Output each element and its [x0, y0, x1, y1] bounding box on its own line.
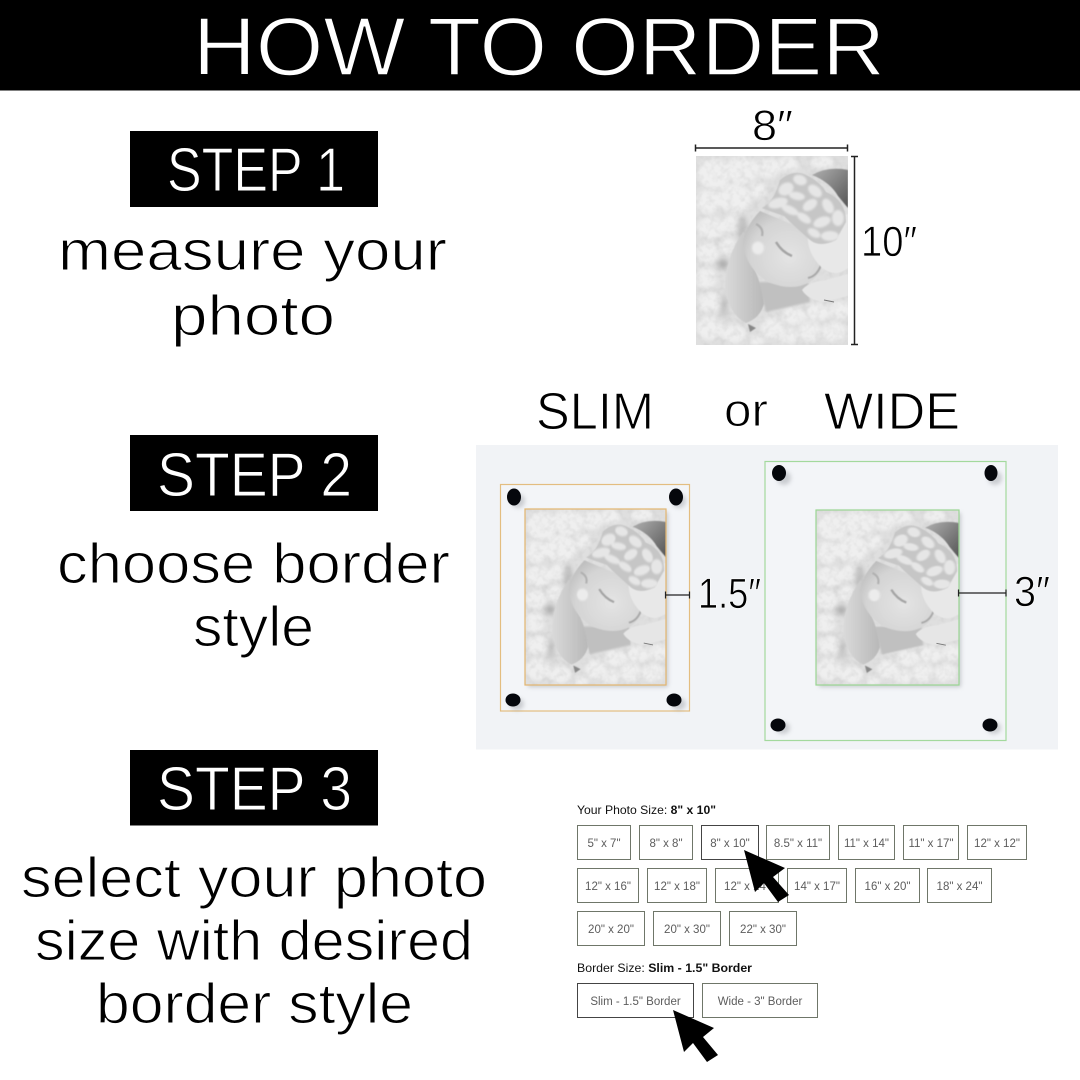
label: 1.5 inch: 1.5″ — [698, 570, 761, 618]
photo size options: 11" x 17" — [908, 838, 954, 850]
step 1 description: photo — [171, 284, 335, 348]
border size options — [578, 984, 818, 1018]
selector heading: border size: Border Size: Slim - 1.5" Border — [577, 961, 752, 975]
step 1 description: measure your — [58, 219, 447, 283]
icon: cursor on size option — [744, 850, 789, 902]
photo size options: 12" x 16" — [585, 881, 631, 893]
step 3 text block — [21, 750, 487, 1036]
measured photo with dimensions — [695, 102, 917, 346]
photo size options — [578, 826, 1026, 946]
step 3 description: border style — [96, 972, 413, 1036]
photo size options: 18" x 24" — [937, 881, 982, 893]
wide frame example — [765, 462, 1050, 740]
photo size options: 5" x 7" — [587, 838, 621, 850]
icon: cursor on border option — [673, 1010, 718, 1062]
step 2 description: choose border — [57, 532, 450, 596]
label: 10 inch: 10″ — [861, 218, 917, 266]
step 1 badge: STEP 1 — [167, 136, 345, 205]
photo size options: 11" x 14" — [844, 838, 889, 850]
border style headings: SLIM — [536, 383, 654, 441]
width dimension line — [696, 144, 848, 152]
step 1 description — [58, 219, 447, 348]
photo size options: 16" x 20" — [865, 881, 910, 893]
border style headings: or — [724, 384, 768, 436]
step 2 description — [57, 532, 450, 659]
step 3 description: size with desired — [35, 909, 473, 973]
step 2 description: style — [193, 595, 314, 659]
step 1 text block — [58, 131, 447, 348]
photo size options: 14" x 17" — [794, 881, 840, 893]
photo size options: 22" x 30" — [740, 924, 786, 936]
photo size options: 12" x 14" — [724, 881, 770, 893]
photo size options: 20" x 20" — [588, 924, 634, 936]
label: 8 inch: 8″ — [752, 102, 793, 150]
slim frame example — [500, 484, 761, 711]
selector heading: photo size: Your Photo Size: 8" x 10" — [577, 803, 716, 817]
border style headings — [536, 383, 960, 441]
title banner — [0, 0, 1080, 93]
height dimension line — [851, 156, 858, 344]
title banner: HOW TO ORDER — [193, 0, 885, 93]
step 3 badge: STEP 3 — [157, 755, 352, 824]
photo: sleeping baby — [695, 156, 850, 346]
photo size options: 12" x 18" — [654, 881, 700, 893]
step 3 description — [21, 846, 487, 1036]
step 3 description: select your photo — [21, 846, 487, 910]
photo size options: 20" x 30" — [664, 924, 710, 936]
label: 3 inch: 3″ — [1014, 568, 1050, 616]
photo size options: 8" x 8" — [649, 838, 683, 850]
step 2 text block — [57, 435, 450, 659]
step 2 badge: STEP 2 — [157, 441, 352, 510]
border style headings: WIDE — [824, 383, 960, 441]
size selector — [577, 803, 1026, 1062]
photo size options: 8.5" x 11" — [774, 838, 822, 850]
panel: border comparison — [476, 445, 1058, 750]
photo size options: 12" x 12" — [974, 838, 1020, 850]
border size options: Slim - 1.5" Border — [590, 996, 681, 1008]
photo size options: 8" x 10" — [710, 838, 750, 850]
border size options: Wide - 3" Border — [718, 996, 802, 1008]
